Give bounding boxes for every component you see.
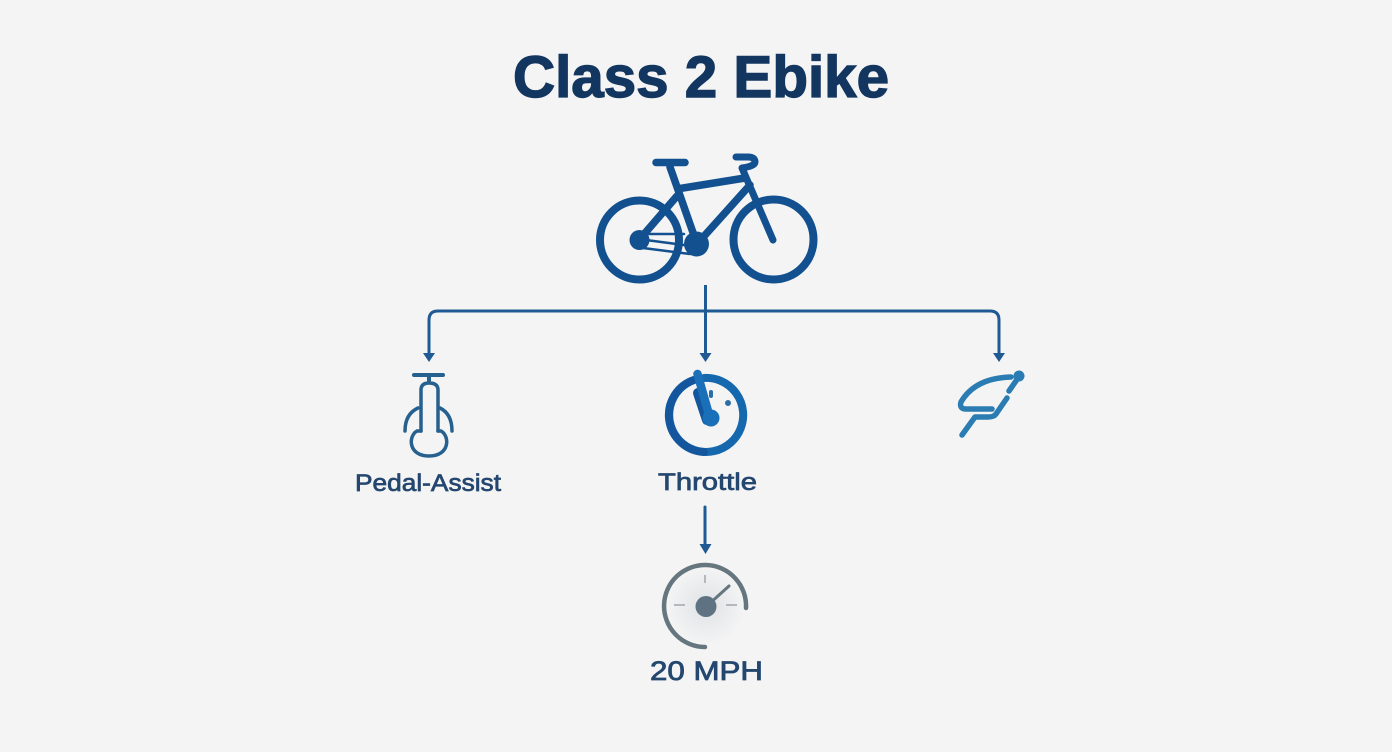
label: Pedal-Assist: Pedal-Assist <box>355 470 501 497</box>
connector: branching arrows <box>423 285 1005 362</box>
title: Class 2 Ebike <box>513 45 889 110</box>
icon: bicycle <box>600 157 814 280</box>
icon: pedal-assist <box>405 375 452 456</box>
label: Throttle: Throttle <box>658 469 757 496</box>
icon: speedometer <box>664 565 746 647</box>
label: 20 MPH: 20 MPH <box>650 656 763 686</box>
icon: third feature glyph <box>961 370 1024 435</box>
icon: throttle <box>669 374 743 452</box>
arrow: throttle to speed <box>700 507 712 554</box>
